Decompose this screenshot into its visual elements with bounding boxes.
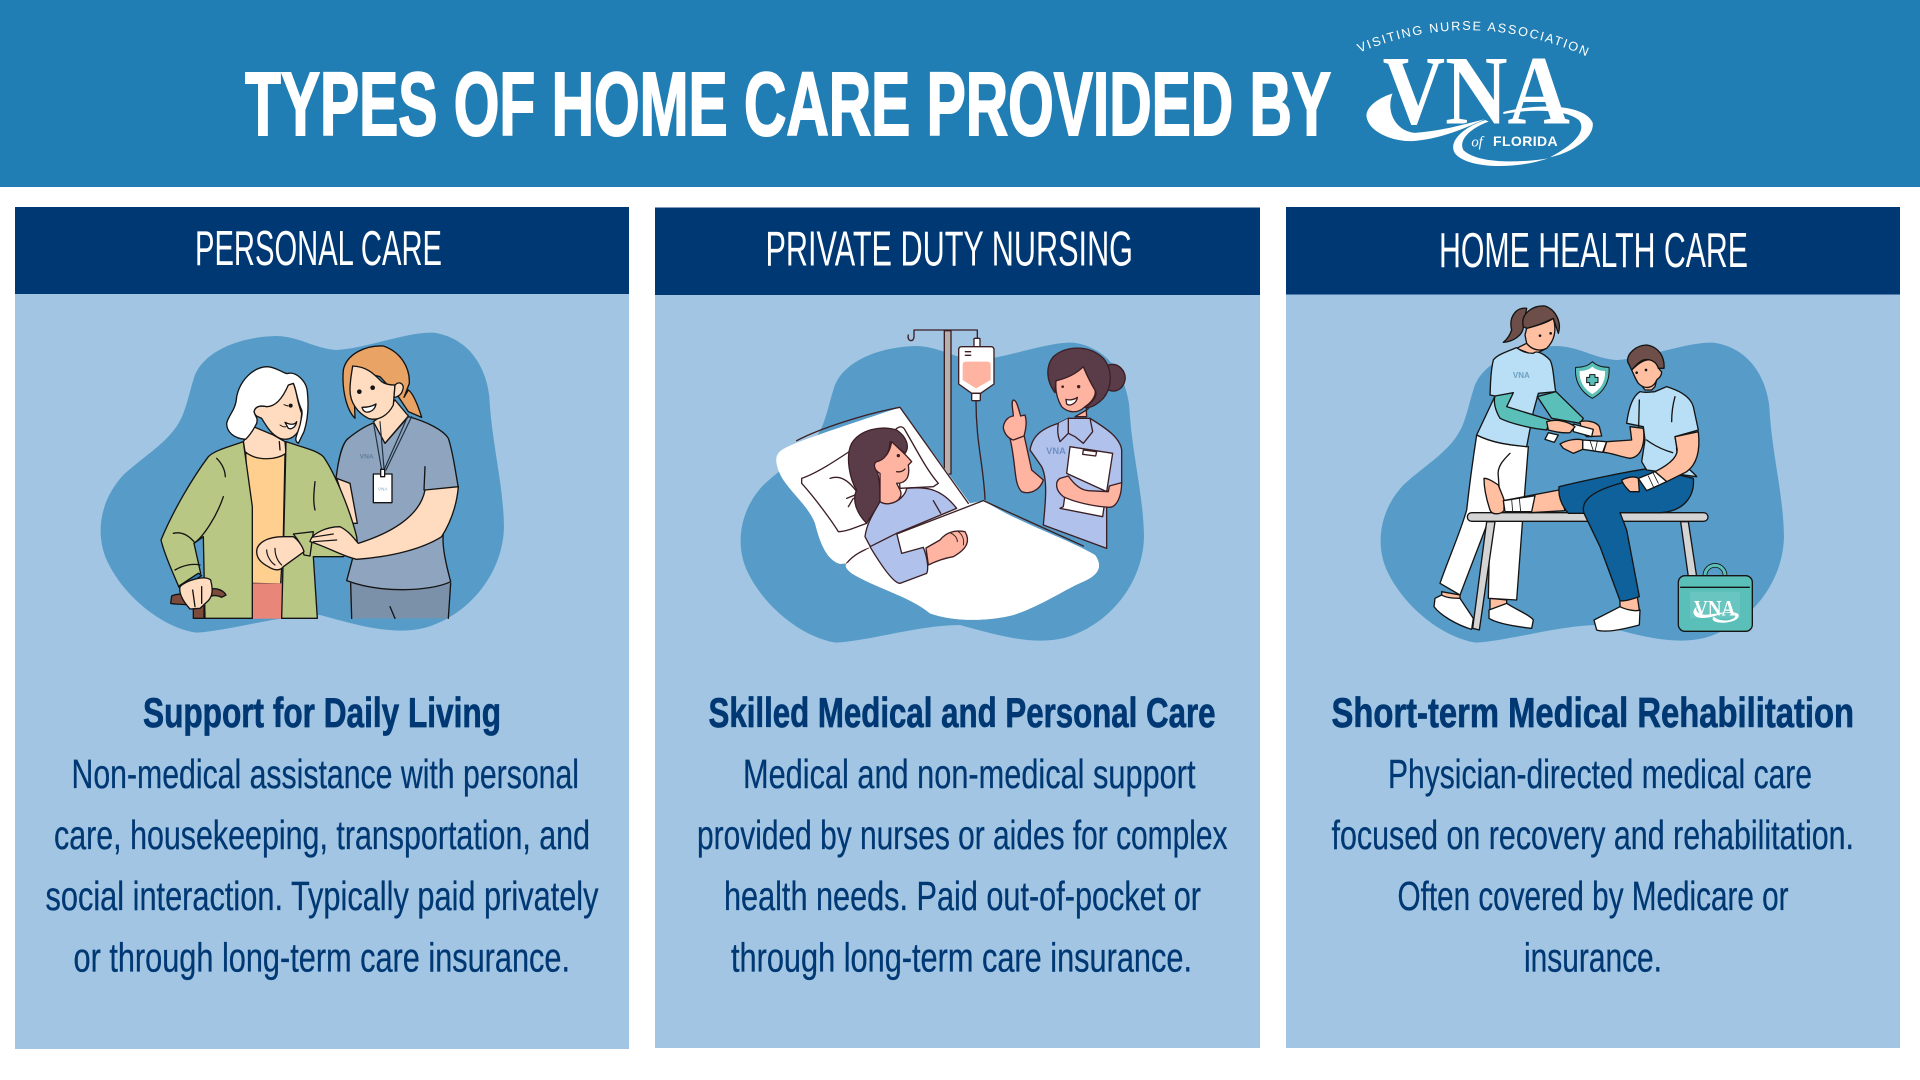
nurse: VNA: [378, 487, 388, 492]
description: private duty nursing: health needs. Paid out-of-pocket or: [724, 873, 1201, 919]
icon: medical shield: [1575, 362, 1609, 398]
nurse: [336, 346, 458, 618]
logo: VNA of Florida: [1356, 21, 1593, 166]
illustration: nurse with patient in bed: [741, 330, 1144, 643]
description: personal care: care, housekeeping, transportation, and: [54, 812, 590, 858]
logo: VNA of Florida: VISITING NURSE ASSOCIATION: [1356, 21, 1589, 56]
description: personal care: social interaction. Typically paid privately: [46, 873, 599, 919]
older woman: [161, 367, 357, 619]
nurse: [1434, 306, 1602, 629]
description: personal care: [46, 751, 599, 980]
description: private duty nursing: through long-term care insurance.: [731, 934, 1192, 980]
description: private duty nursing: provided by nurses or aides for complex: [697, 812, 1228, 858]
nurse: VNA: [1513, 371, 1530, 380]
description: home health care: [1332, 751, 1854, 980]
description: private duty nursing: Medical and non-medical support: [743, 751, 1196, 797]
panel heading: personal care: PERSONAL CARE: [195, 222, 442, 276]
cane: [171, 589, 226, 618]
subheading: support for daily living: Support for Daily Living: [143, 689, 501, 736]
IV stand and bag: [908, 330, 994, 499]
patient: [849, 428, 957, 583]
illustration: nurse helping older woman: [101, 333, 504, 633]
logo: VNA of Florida: VNA: [1383, 36, 1570, 145]
blanket and patient arm: [846, 501, 1099, 620]
description: home health care: insurance.: [1524, 934, 1662, 980]
patient: [1484, 345, 1699, 631]
logo: VNA of Florida: of: [1471, 135, 1485, 151]
bench: [1467, 513, 1708, 630]
description: personal care: or through long-term care insurance.: [74, 934, 570, 980]
panel: personal care: [15, 207, 629, 1049]
panel: home health care: [1286, 207, 1900, 1048]
header band: [0, 0, 1920, 187]
description: personal care: Non-medical assistance with personal: [72, 751, 579, 797]
medical bag with VNA logo: [1678, 565, 1752, 631]
nurse hand behind arm: [313, 504, 325, 527]
nurse: [1003, 348, 1125, 548]
nurse forearm and hand: [310, 487, 458, 559]
nurse: VNA: [1046, 446, 1066, 456]
pillow: [802, 427, 938, 532]
medical bag with VNA logo: VNA: [1694, 595, 1736, 620]
description: private duty nursing: [697, 751, 1228, 980]
nurse: VNA: [360, 454, 374, 461]
panel: private duty nursing: [655, 208, 1260, 1048]
hospital bed: [776, 407, 1099, 620]
subheading: skilled medical and personal care: Skilled Medical and Personal Care: [708, 689, 1216, 736]
panel heading: private duty nursing: PRIVATE DUTY NURSING: [766, 222, 1133, 276]
title: TYPES OF HOME CARE PROVIDED BY: [245, 55, 1331, 155]
logo: VNA of Florida: FLORIDA: [1493, 133, 1558, 149]
illustration: nurse bandaging patient on bench: [1381, 306, 1784, 643]
